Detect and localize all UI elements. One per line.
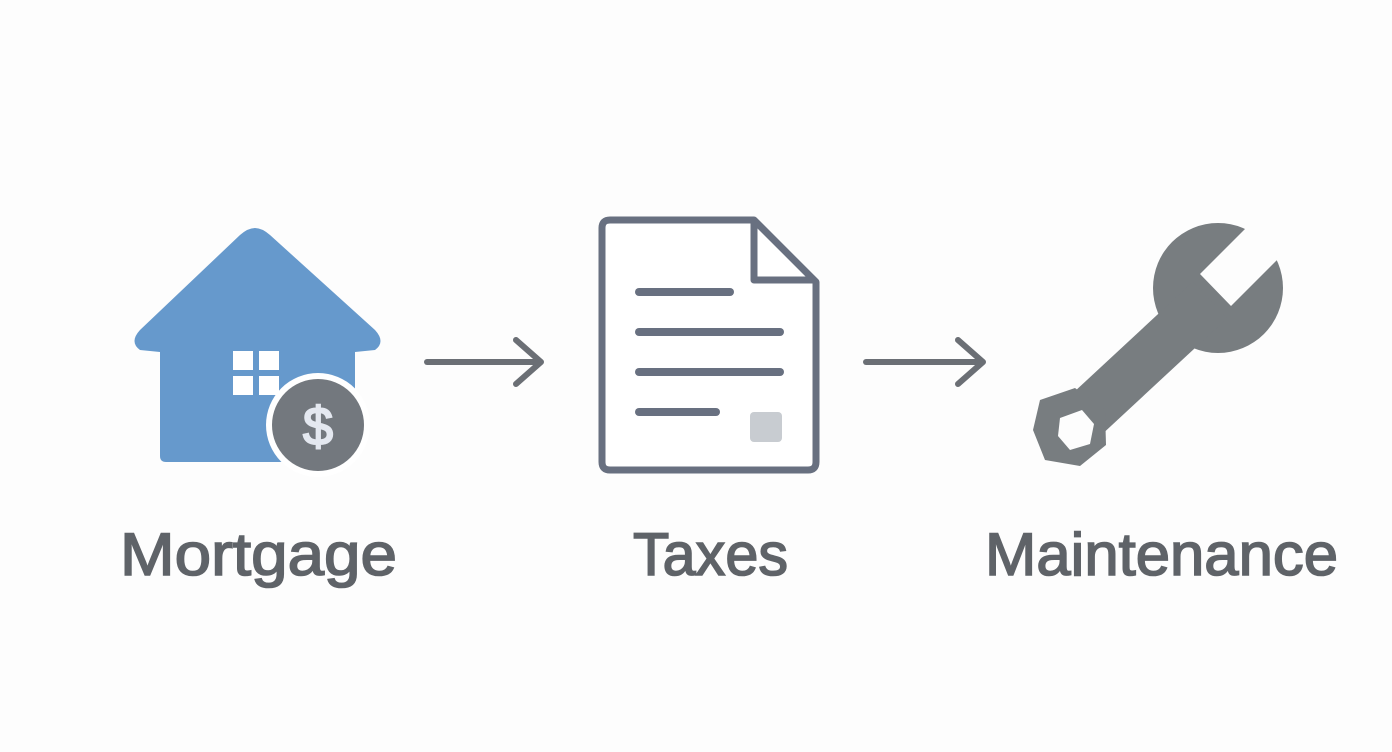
icon: wrench xyxy=(1033,174,1331,466)
arrow 2 xyxy=(866,340,983,384)
icon: tax document xyxy=(602,220,816,470)
label: Maintenance: Maintenance xyxy=(985,521,1338,588)
icon: house with dollar coin: $ xyxy=(303,397,333,457)
label: Mortgage: Mortgage xyxy=(120,521,397,588)
icon: house with dollar coin xyxy=(134,228,380,477)
label: Taxes: Taxes xyxy=(633,521,788,588)
arrow 1 xyxy=(427,340,541,384)
